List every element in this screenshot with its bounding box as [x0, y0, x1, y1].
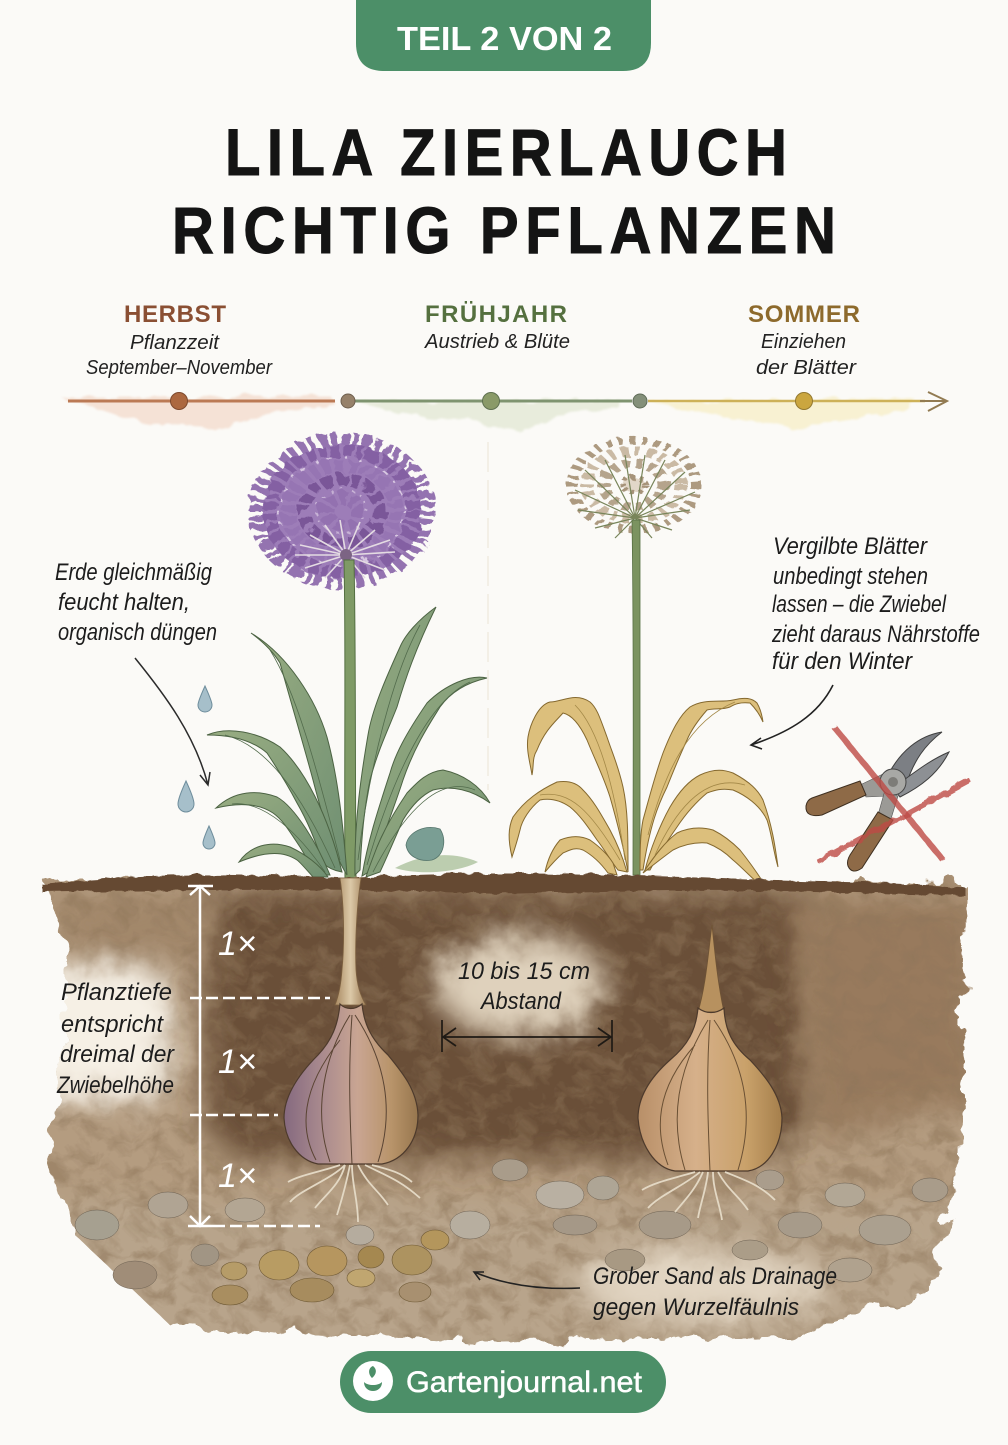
callout: keep yellow leaves: Vergilbte Blätter — [773, 533, 928, 560]
arrow: drainage note to sand — [474, 1272, 580, 1288]
season: Sommer: der Blätter — [756, 357, 857, 379]
season: Herbst: Pflanzzeit — [130, 332, 220, 354]
seed head — [572, 440, 696, 538]
season: Sommer: Einziehen — [761, 331, 846, 353]
callout: watering note: Erde gleichmäßig — [55, 559, 213, 586]
small blue leaf and wash — [395, 827, 478, 872]
callout: planting depth: entspricht — [61, 1011, 164, 1038]
season: Sommer: SOMMER — [748, 301, 860, 328]
title — [172, 117, 836, 268]
depth multipliers: 1× — [218, 1043, 257, 1081]
neck — [335, 878, 366, 1005]
bulb: left planted bulb — [284, 878, 420, 1222]
callout: spacing: Abstand — [479, 988, 562, 1015]
depth multipliers — [218, 925, 257, 1195]
title: RICHTIG PFLANZEN — [172, 195, 836, 268]
bulb: right planted bulb — [638, 925, 782, 1220]
callout: watering note — [55, 559, 217, 646]
roots — [288, 1165, 420, 1222]
gravel stones — [75, 1159, 948, 1289]
marker: transition spring to summer — [633, 394, 647, 408]
callout: watering note: organisch düngen — [58, 619, 217, 646]
header badge: Teil 2 von 2 — [356, 0, 651, 71]
season labels — [86, 301, 860, 379]
drainage pebbles — [212, 1230, 449, 1305]
callout: planting depth — [56, 979, 175, 1099]
callout: planting depth: Pflanztiefe — [61, 979, 172, 1006]
spacing dimension arrow — [442, 1020, 612, 1052]
callout: drainage — [593, 1263, 837, 1321]
light patch behind depth label — [20, 965, 170, 1100]
flower head: purple — [256, 439, 428, 584]
neck and shoot — [698, 925, 724, 1012]
surface crust — [42, 874, 966, 896]
dark soil zone — [205, 890, 810, 1160]
light patch lower right — [575, 1249, 825, 1321]
callout: keep yellow leaves: unbedingt stehen — [773, 563, 928, 590]
foliage — [207, 607, 490, 877]
callout: planting depth: Zwiebelhöhe — [56, 1072, 174, 1099]
plant: flowering allium — [207, 439, 490, 878]
dried yellow leaves — [509, 698, 778, 893]
plant: faded allium — [509, 440, 778, 893]
arrow: watering note to drops — [135, 658, 210, 785]
footer badge: Gartenjournal.net — [340, 1351, 666, 1413]
callout: planting depth: dreimal der — [60, 1041, 175, 1068]
callout: keep yellow leaves: für den Winter — [772, 648, 913, 675]
season: Frühjahr: FRÜHJAHR — [425, 301, 567, 328]
callout: keep yellow leaves — [771, 533, 980, 675]
callout: watering note: feucht halten, — [58, 589, 190, 616]
icon: water drops — [178, 686, 215, 849]
arrow: callout to yellow leaves — [751, 685, 833, 749]
light patch behind spacing label — [435, 933, 605, 1037]
season: Herbst: September–November — [86, 357, 273, 379]
icon: crossed-out secateurs — [806, 727, 970, 871]
bulb body — [638, 1008, 782, 1171]
season: Frühjahr: Austrieb & Blüte — [424, 331, 570, 353]
marker: transition autumn to spring — [341, 394, 355, 408]
callout: drainage: Grober Sand als Drainage — [593, 1263, 837, 1290]
bulb body — [284, 1004, 418, 1164]
roots — [642, 1172, 775, 1220]
stem — [344, 560, 356, 878]
callout: keep yellow leaves: lassen – die Zwiebel — [772, 591, 947, 618]
marker: Sommer — [796, 392, 812, 410]
title: LILA ZIERLAUCH — [225, 117, 787, 190]
upper soil edges — [790, 895, 980, 1140]
depth multipliers: 1× — [218, 925, 257, 963]
header badge: Teil 2 von 2: TEIL 2 VON 2 — [397, 20, 612, 57]
season: Sommer — [748, 301, 860, 379]
footer badge: Gartenjournal.net: Gartenjournal.net — [406, 1366, 643, 1399]
season: Herbst — [86, 301, 273, 379]
dried stem — [632, 520, 640, 875]
season: Herbst: HERBST — [124, 301, 226, 328]
depth scale — [188, 886, 330, 1226]
marker: Frühjahr — [482, 392, 500, 410]
callout: spacing — [458, 958, 590, 1015]
callout: drainage: gegen Wurzelfäulnis — [593, 1294, 799, 1321]
soil cross-section — [42, 872, 973, 1348]
lower gravel band — [58, 1193, 956, 1348]
depth multipliers: 1× — [218, 1157, 257, 1195]
timeline arrow with season markers — [62, 392, 947, 432]
season: Frühjahr — [424, 301, 570, 353]
marker: Herbst — [170, 392, 188, 410]
callout: spacing: 10 bis 15 cm — [458, 958, 590, 985]
